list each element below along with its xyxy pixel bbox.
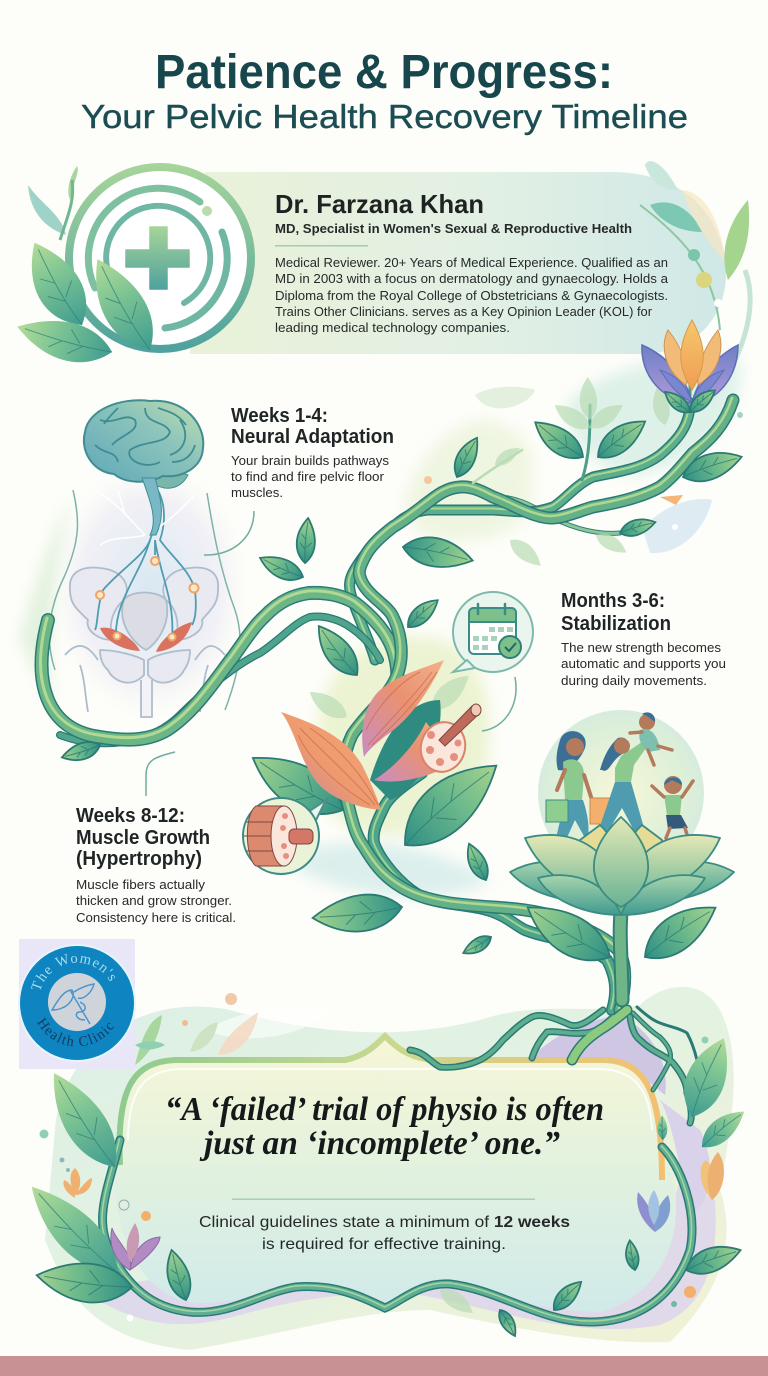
vine strand: pelvis second (60, 617, 380, 743)
woman lifting baby (597, 712, 672, 840)
logo: The Women's Health Clinic: The Women's (30, 954, 116, 990)
text block: weeks 8-12: Muscle fibers actually (76, 877, 206, 892)
illustration: muscles (281, 660, 481, 810)
quote: “A ‘failed’ trial of physio is often (165, 1091, 604, 1128)
icon: medical cross logo (12, 166, 251, 372)
text block: weeks 1-4: muscles. (231, 485, 283, 500)
guideline note: is required for effective training. (262, 1236, 506, 1253)
text block: weeks 1-4: Weeks 1-4: (231, 405, 328, 427)
text block: weeks 8-12: thicken and grow stronger. (76, 893, 232, 908)
woman with bags (546, 731, 610, 842)
doctor biography (275, 255, 669, 335)
panel: quote (17, 993, 751, 1339)
quote: just an ‘incomplete’ one.” (199, 1125, 560, 1162)
vine strand: central stem (342, 398, 733, 1010)
pale background leaves (304, 668, 475, 725)
text block: months 3-6 (561, 590, 726, 688)
doctor biography: MD in 2003 with a focus on dermatology and gynaecology. Holds a (275, 271, 669, 286)
text block: weeks 8-12: Weeks 8-12: (76, 805, 185, 827)
title: Patience & Progress: (155, 46, 613, 99)
lotus stem (620, 905, 622, 1000)
text block: weeks 8-12: Consistency here is critical. (76, 910, 236, 925)
muscle: cross-section (374, 704, 481, 782)
flower: blue (637, 1190, 670, 1232)
decorative sprigs and dots (40, 993, 708, 1322)
guideline note (199, 1214, 570, 1253)
connector: muscle growth (146, 752, 175, 796)
doctor biography: leading medical technology companies. (275, 320, 510, 335)
frame vine (102, 1139, 692, 1322)
frame border (119, 1036, 662, 1180)
title: Your Pelvic Health Recovery Timeline (81, 98, 688, 135)
vine strand: from pelvis (41, 591, 397, 740)
text block: months 3-6: Months 3-6: (561, 590, 665, 612)
footer band (0, 1356, 768, 1376)
callout: calendar icon (453, 592, 533, 672)
text block: months 3-6: during daily movements. (561, 673, 707, 688)
illustration: family on lotus (510, 710, 734, 1000)
logo: The Women's Health Clinic (18, 939, 136, 1069)
flower: purple (111, 1200, 160, 1270)
soft background washes (20, 357, 743, 897)
vine strand: upper branch (349, 402, 690, 660)
body outline (49, 490, 240, 710)
callout: muscle fiber icon (243, 798, 326, 874)
text block: weeks 1-4 (231, 405, 394, 500)
flower: orange left (63, 1168, 92, 1198)
text block: weeks 8-12: (Hypertrophy) (76, 848, 202, 870)
flower: top right lotus (642, 320, 738, 417)
text block: months 3-6: automatic and supports you (561, 656, 726, 671)
nerve pathways (95, 482, 196, 638)
decorative top-right foliage (640, 161, 750, 400)
muscle: left (281, 712, 381, 810)
logo: The Women's Health Clinic: Health Clinic (37, 1017, 114, 1046)
leaf cluster: upper vine (60, 377, 745, 765)
main vine and leaves (41, 377, 745, 1010)
background circle (538, 710, 704, 876)
text block: weeks 1-4: Your brain builds pathways (231, 453, 389, 468)
lotus petals (510, 817, 734, 915)
nerve signal points (96, 557, 198, 640)
text block: weeks 8-12: Muscle Growth (76, 827, 210, 849)
frame leaves (17, 1031, 751, 1339)
pelvic floor muscles (100, 628, 140, 651)
text block: weeks 8-12 (76, 805, 236, 925)
brain (84, 400, 203, 488)
muscle: upper (362, 660, 444, 757)
doctor biography: Medical Reviewer. 20+ Years of Medical Experience. Qualified as an (275, 255, 668, 270)
child with raised arms (652, 776, 693, 838)
roots over frame (410, 1007, 697, 1123)
doctor credentials: MD, Specialist in Women's Sexual & Reproductive Health (275, 221, 632, 236)
illustration: brain and pelvis (49, 400, 250, 720)
guideline note: Clinical guidelines state a minimum of 12 weeks (199, 1214, 570, 1231)
doctor biography: Trains Other Clinicians. serves as a Key Opinion Leader (KOL) for (275, 304, 653, 319)
text block: months 3-6: Stabilization (561, 613, 671, 635)
quote background wash (45, 987, 734, 1350)
vine strand: thin branch (493, 497, 620, 533)
quote (165, 1091, 604, 1162)
text block: weeks 1-4: to find and fire pelvic floor (231, 469, 385, 484)
text block: months 3-6: The new strength becomes (561, 640, 722, 655)
leaf cluster: lower vine (242, 700, 725, 975)
flower: orange right (701, 1152, 724, 1200)
vine strand: second lower stem (373, 772, 615, 1010)
connector: stabilization (482, 677, 516, 731)
text block: weeks 1-4: Neural Adaptation (231, 426, 394, 448)
connector: neural adaptation (204, 511, 254, 555)
pelvis skeleton (65, 568, 225, 717)
title (81, 46, 688, 135)
panel: doctor profile (12, 161, 750, 400)
doctor name: Dr. Farzana Khan (275, 189, 484, 219)
doctor biography: Diploma from the Royal College of Obstetricians & Gynaecologists. (275, 288, 668, 303)
frame interior (115, 1033, 676, 1312)
